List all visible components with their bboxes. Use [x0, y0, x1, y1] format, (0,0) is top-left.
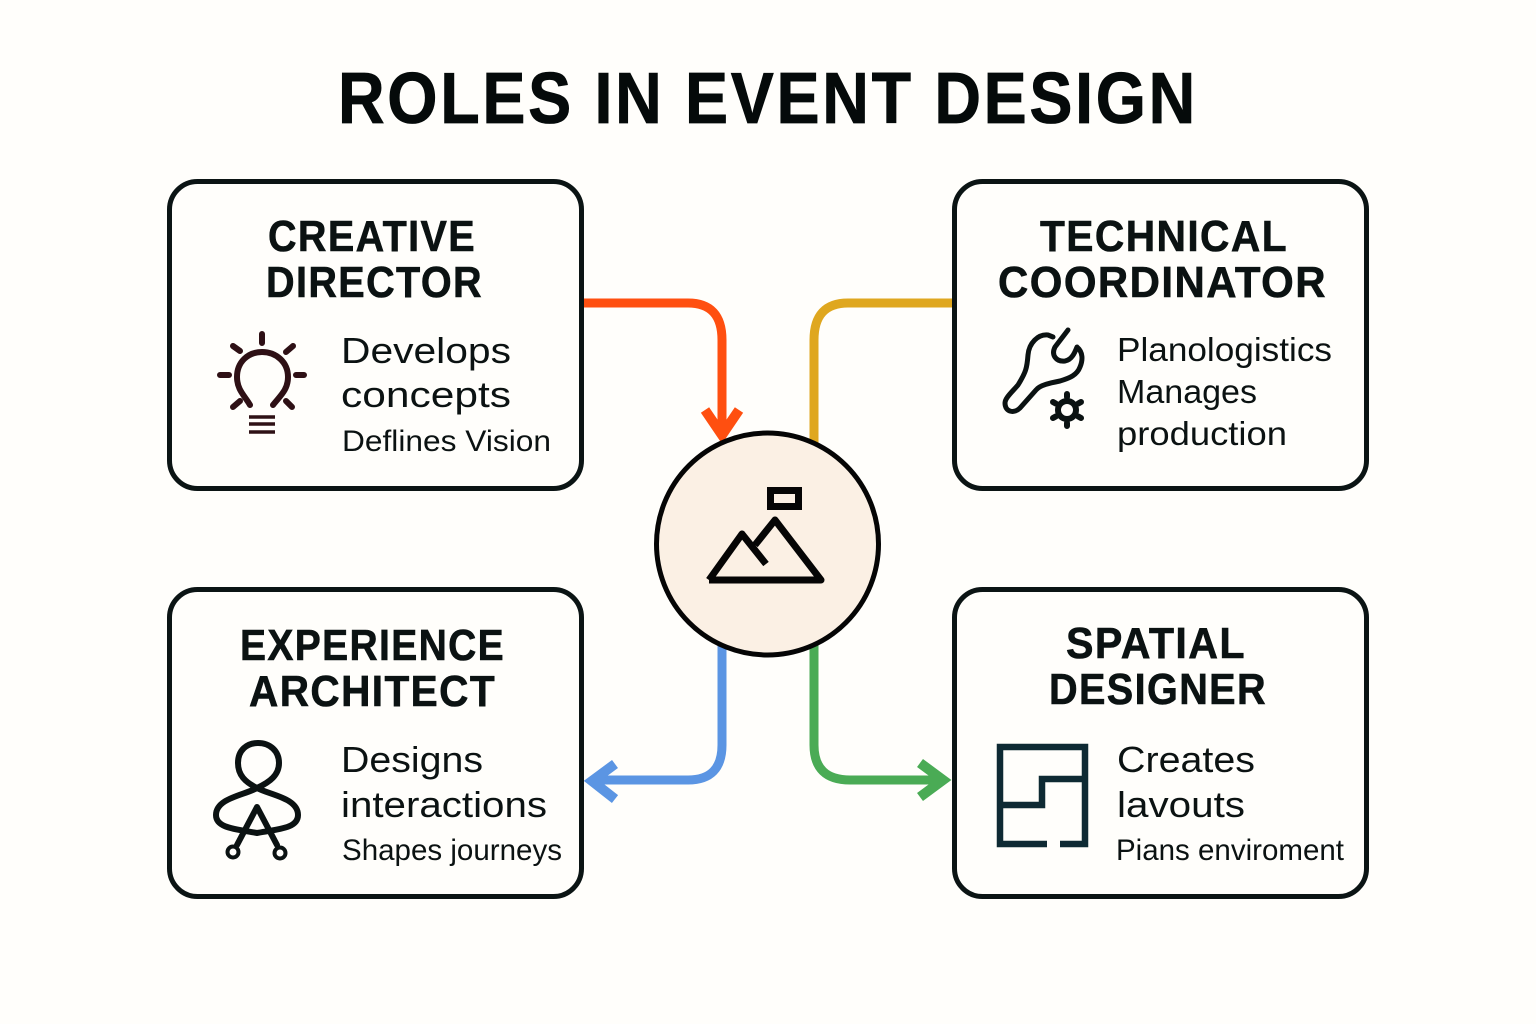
- icon: wrench and gear: [1005, 330, 1082, 426]
- heading: creative director: [266, 212, 483, 307]
- text: spatial designer duties: Creates: [1117, 739, 1255, 780]
- title: ROLES IN EVENT DESIGN: [338, 59, 1198, 139]
- text: technical coordinator duties: [1117, 331, 1332, 452]
- text: creative director duties: Deflines Vision: [342, 425, 551, 458]
- arrow: creative director to centre: [584, 303, 739, 436]
- text: experience architect duties: Designs: [341, 739, 483, 780]
- arrow: centre to spatial designer: [814, 640, 943, 797]
- heading: spatial designer: SPATIAL: [1066, 619, 1246, 668]
- heading: creative director: CREATIVE: [268, 212, 476, 261]
- panel: experience architect: [170, 590, 582, 896]
- central hub: [656, 433, 878, 655]
- text: experience architect duties: interactions: [341, 784, 547, 825]
- panel: technical coordinator: [954, 182, 1366, 488]
- text: creative director duties: [341, 330, 551, 458]
- text: experience architect duties: [341, 739, 562, 867]
- text: technical coordinator duties: Planologistics: [1117, 331, 1332, 368]
- icon: person with compass: [216, 743, 298, 858]
- icon: floor plan: [1000, 747, 1085, 844]
- heading: experience architect: EXPERIENCE: [240, 621, 505, 670]
- text: creative director duties: Develops: [341, 330, 511, 371]
- text: technical coordinator duties: production: [1117, 415, 1287, 452]
- heading: spatial designer: DESIGNER: [1049, 665, 1267, 714]
- panel: creative director: [170, 182, 582, 488]
- heading: technical coordinator: [998, 212, 1327, 307]
- text: creative director duties: concepts: [341, 374, 511, 415]
- text: experience architect duties: Shapes journeys: [342, 834, 562, 867]
- hub circle: [656, 433, 878, 655]
- connector: technical coordinator to centre: [814, 303, 952, 450]
- icon: light bulb: [220, 334, 304, 432]
- icon: flag and mountains: [709, 490, 821, 580]
- text: spatial designer duties: lavouts: [1117, 784, 1245, 825]
- heading: creative director: DIRECTOR: [266, 258, 483, 307]
- text: spatial designer duties: [1116, 739, 1345, 867]
- arrow: centre to experience architect: [592, 640, 722, 799]
- text: technical coordinator duties: Manages: [1117, 373, 1257, 410]
- heading: technical coordinator: COORDINATOR: [998, 258, 1327, 307]
- heading: experience architect: [240, 621, 505, 716]
- heading: technical coordinator: TECHNICAL: [1040, 212, 1288, 261]
- panel: spatial designer: [954, 590, 1366, 896]
- heading: spatial designer: [1049, 619, 1267, 714]
- text: spatial designer duties: Pians enviroment: [1116, 834, 1345, 867]
- heading: experience architect: ARCHITECT: [249, 667, 496, 716]
